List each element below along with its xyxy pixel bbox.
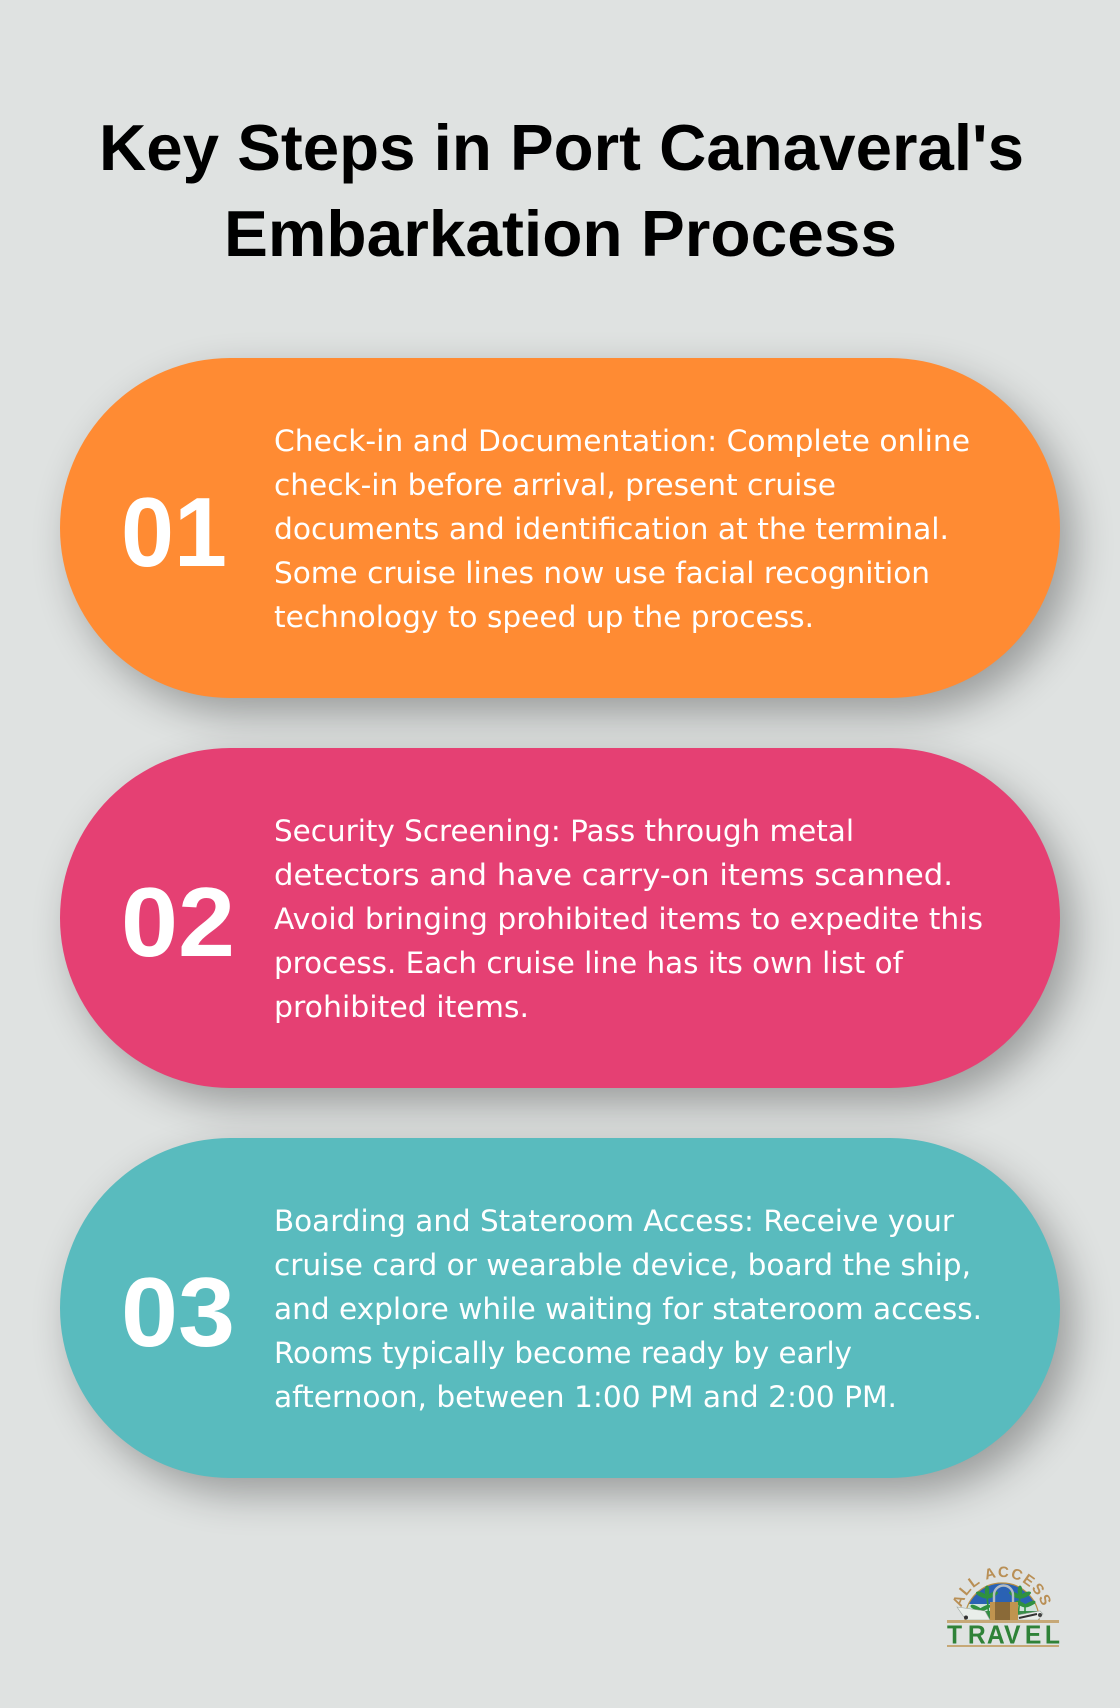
logo arc text: ALL ACCESS xyxy=(953,1566,1051,1608)
logo boats xyxy=(957,1607,1043,1620)
step 03 description: afternoon, between 1:00 PM and 2:00 PM. xyxy=(274,1380,897,1414)
step 03 description xyxy=(274,1204,982,1414)
step 03 description: and explore while waiting for stateroom access. xyxy=(274,1292,982,1326)
step number 01: 01 xyxy=(121,477,227,587)
step 02 description: Security Screening: Pass through metal xyxy=(274,814,854,848)
panel: step 02 security screening xyxy=(60,748,1060,1088)
title xyxy=(99,111,1024,270)
logo: All Access Travel xyxy=(947,1566,1060,1650)
logo palm trees xyxy=(970,1586,1036,1618)
step 02 description: detectors and have carry-on items scanned. xyxy=(274,858,953,892)
logo padlock xyxy=(990,1586,1018,1620)
step 02 description: prohibited items. xyxy=(274,990,529,1024)
panel: step 03 boarding and stateroom access xyxy=(60,1138,1060,1478)
step 02 description: process. Each cruise line has its own list of xyxy=(274,946,904,980)
step 03 description: Boarding and Stateroom Access: Receive your xyxy=(274,1204,955,1238)
logo globe dome xyxy=(968,1584,1038,1620)
step 01 description: Some cruise lines now use facial recognition xyxy=(274,556,930,590)
panel: step 01 check-in and documentation xyxy=(60,358,1060,698)
step 03 description: cruise card or wearable device, board the ship, xyxy=(274,1248,971,1282)
title: Embarkation Process xyxy=(224,197,897,270)
step 02 description: Avoid bringing prohibited items to expedite this xyxy=(274,902,983,936)
step 01 description: check-in before arrival, present cruise xyxy=(274,468,836,502)
step 01 description xyxy=(274,424,970,634)
step number 02: 02 xyxy=(121,867,235,977)
title: Key Steps in Port Canaveral's xyxy=(99,111,1024,184)
step 02 description xyxy=(274,814,983,1024)
step 01 description: technology to speed up the process. xyxy=(274,600,814,634)
step 01 description: documents and identification at the terminal. xyxy=(274,512,949,546)
logo gold bars xyxy=(947,1620,1059,1647)
step number 03: 03 xyxy=(121,1257,235,1367)
logo wordmark: TRAVEL xyxy=(947,1621,1060,1650)
step 03 description: Rooms typically become ready by early xyxy=(274,1336,852,1370)
step 01 description: Check-in and Documentation: Complete online xyxy=(274,424,970,458)
